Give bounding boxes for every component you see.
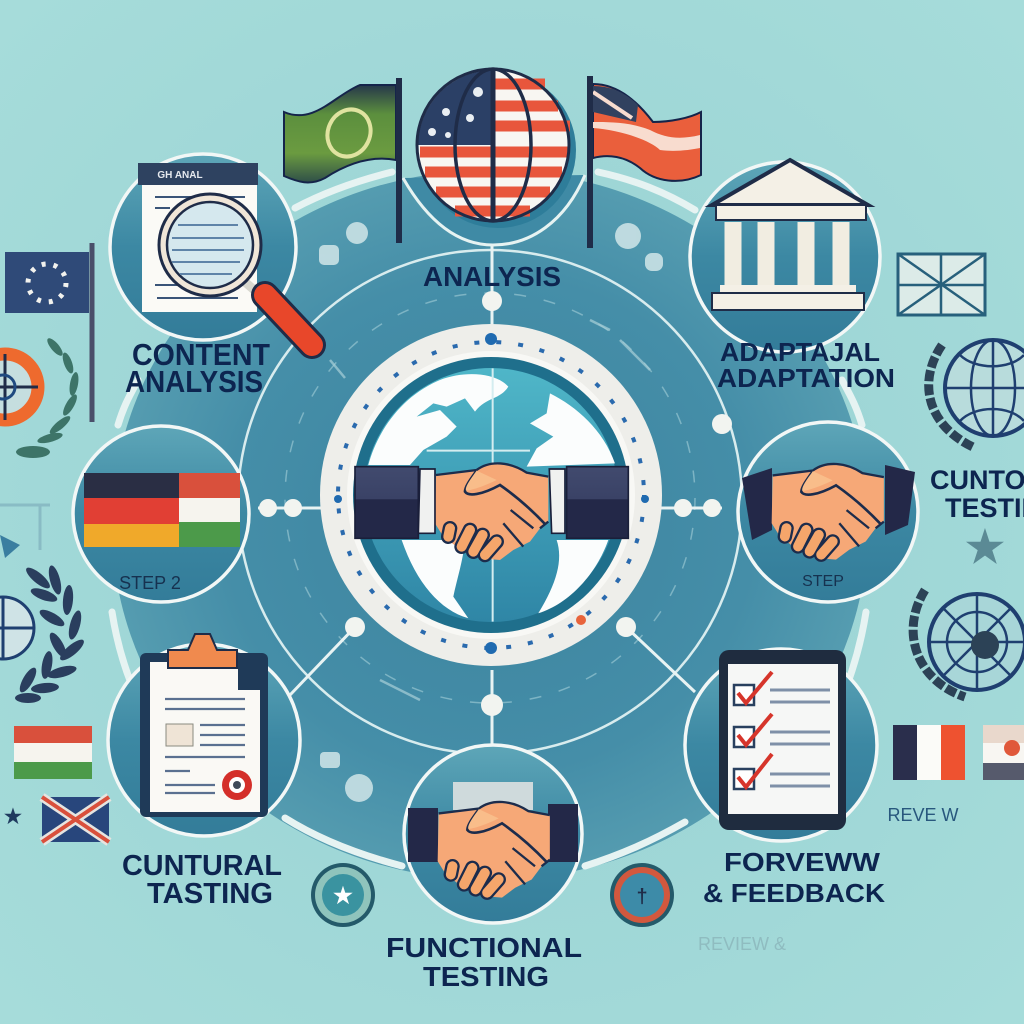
icon: magnifier [159, 194, 312, 345]
heading: content analysis: CONTENT [132, 337, 270, 372]
left side flags and emblems [0, 243, 109, 842]
text: ANALYSIS [125, 364, 263, 399]
orange-red flag [590, 76, 701, 248]
faint label: review: REVIEW & [698, 934, 786, 954]
text: & FEEDBACK [703, 878, 885, 908]
label: review: REVE W [887, 805, 959, 825]
globe land masses [368, 368, 615, 622]
star badges: ★ [965, 523, 1005, 572]
green flag [284, 78, 399, 243]
heading: cultural testing: CUNTURAL [122, 850, 282, 882]
heading: adaptation: ADAPTAJAL [720, 337, 880, 367]
label: culture testing: CUNTO [930, 465, 1024, 495]
node: step 2 flags: STEP 2 [119, 573, 181, 593]
text: TASTING [147, 878, 273, 910]
right side flags and emblems [893, 254, 1024, 780]
main circular disc [112, 170, 868, 880]
star badges [4, 523, 1005, 927]
central globe with handshake [320, 324, 662, 666]
node: cultural testing document [108, 634, 300, 836]
heading: review and feedback: FORVEWW [724, 847, 881, 877]
node: content analysis [110, 154, 312, 345]
star badges: † [636, 886, 648, 908]
node: handshake right [738, 422, 918, 602]
top node arc [403, 175, 585, 245]
top globe with stripes [417, 69, 576, 228]
heading: analysis: ANALYSIS [423, 261, 561, 292]
node: handshake right: STEP [802, 573, 844, 590]
star badges: ★ [333, 883, 353, 908]
node: step 2 flags [73, 426, 249, 602]
node: content analysis: GH ANAL [157, 170, 203, 181]
label: culture testing [930, 465, 1024, 523]
text: TESTING [423, 961, 549, 992]
heading: functional testing: FUNCTIONAL [386, 932, 582, 963]
node: bottom handshake [404, 745, 582, 923]
node: adaptation [690, 160, 880, 352]
text: ADAPTATION [717, 363, 895, 393]
star badges: ★ [4, 806, 22, 828]
handshake [355, 463, 628, 560]
node: review checklist tablet [685, 649, 877, 841]
